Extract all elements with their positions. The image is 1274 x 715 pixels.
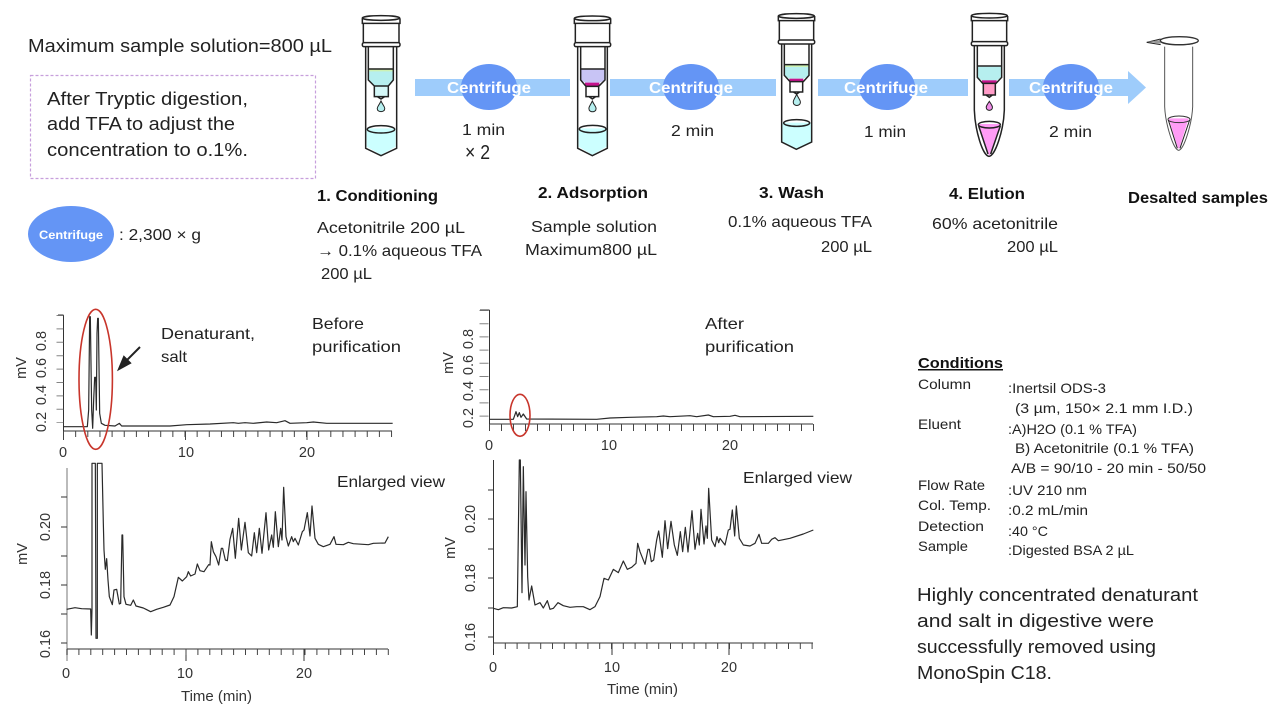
highlight: residual peak ellipse	[510, 394, 530, 436]
chart: after purification full scale: mV	[441, 352, 457, 374]
trace: after purification enlarged chromatogram	[493, 460, 813, 610]
callout: add TFA note	[30, 76, 316, 178]
panel: conditions: :0.2 mL/min	[1008, 502, 1088, 518]
label: after purification	[705, 316, 794, 356]
chart: before purification enlarged: 10	[177, 666, 193, 682]
callout: add TFA note: concentration to o.1%.	[47, 140, 248, 160]
chart: before purification full scale: 0.4	[34, 385, 50, 405]
step 2: adsorption	[525, 185, 657, 259]
label: enlarged view left: Enlarged view	[337, 474, 445, 491]
label: centrifuge time 1	[462, 122, 505, 164]
text block: conclusion: successfully removed using	[917, 637, 1156, 657]
chart: before purification full scale: 0.2	[34, 412, 50, 432]
chart: before purification full scale: 0	[59, 445, 67, 461]
chart: after purification enlarged: 0.18	[463, 564, 479, 592]
text block: conclusion	[917, 585, 1198, 683]
panel: conditions: Eluent	[918, 416, 961, 432]
arrow: step 3 to 4 centrifuge	[818, 64, 968, 110]
step 2: adsorption: 2. Adsorption	[538, 185, 648, 202]
step 4: elution: 60% acetonitrile	[932, 216, 1058, 233]
chart: before purification enlarged: 0.18	[38, 571, 54, 599]
label: before purification: Before	[312, 316, 364, 333]
step 4: elution: 200 µL	[1007, 239, 1058, 256]
chart: after purification enlarged: Time (min)	[607, 682, 678, 698]
chart: before purification enlarged	[15, 463, 389, 705]
chart: after purification enlarged: 0	[489, 660, 497, 676]
label: enlarged view right: Enlarged view	[743, 470, 852, 487]
step 1: conditioning	[317, 188, 482, 283]
panel: conditions: Conditions	[918, 355, 1003, 372]
arrow: step 4 to desalted samples	[1009, 64, 1146, 110]
chart: before purification full scale: 0.6	[34, 358, 50, 378]
chart: before purification full scale: mV	[14, 357, 30, 379]
chart: after purification full scale: 10	[601, 438, 617, 454]
label: centrifuge time 2: 2 min	[671, 123, 714, 140]
callout: add TFA note: add TFA to adjust the	[47, 114, 235, 134]
icon: elution spin tube	[971, 13, 1008, 156]
chart: after purification full scale: 0.4	[461, 381, 477, 401]
arrow: step 2 to 3 centrifuge	[610, 64, 776, 110]
step 4: elution	[932, 186, 1058, 256]
step 3: wash: 3. Wash	[759, 185, 824, 202]
label: denaturant, salt: Denaturant,	[161, 326, 255, 343]
chart: after purification enlarged: 0.16	[463, 623, 479, 651]
step 3: wash: 0.1% aqueous TFA	[728, 214, 872, 231]
step 5: desalted samples: Desalted samples	[1128, 190, 1268, 207]
icon: conditioning spin tube	[362, 16, 400, 156]
chart: before purification enlarged: 0.20	[38, 513, 54, 541]
chart: after purification full scale: 0.6	[461, 355, 477, 375]
chart: after purification full scale: 0.2	[461, 408, 477, 428]
chart: after purification full scale: 0	[485, 438, 493, 454]
chart: after purification full scale	[441, 310, 814, 454]
trace: before purification chromatogram	[63, 317, 393, 428]
panel: conditions: (3 µm, 150× 2.1 mm I.D.)	[1015, 400, 1193, 416]
text block: conclusion: Highly concentrated denaturant	[917, 585, 1198, 605]
icon: adsorption spin tube	[574, 16, 611, 156]
arrow: step 4 to desalted samples: Centrifuge	[1029, 80, 1113, 97]
panel: conditions	[918, 355, 1206, 558]
chart: before purification full scale: 10	[178, 445, 194, 461]
chart: before purification enlarged: Time (min)	[181, 689, 252, 705]
step 4: elution: 4. Elution	[949, 186, 1025, 203]
chart: after purification enlarged: 0.20	[463, 505, 479, 533]
label: denaturant, salt	[161, 326, 255, 366]
label: before purification	[312, 316, 401, 356]
callout: add TFA note: After Tryptic digestion,	[47, 89, 248, 109]
step 2: adsorption: Maximum800 µL	[525, 242, 657, 259]
heading: maximum sample solution: Maximum sample solution=800 µL	[28, 36, 332, 56]
panel: conditions: :Inertsil ODS-3	[1008, 380, 1106, 396]
text block: conclusion: MonoSpin C18.	[917, 663, 1052, 683]
chart: after purification full scale: 0.8	[461, 329, 477, 349]
step 1: conditioning: 200 µL	[321, 266, 372, 283]
panel: conditions: Sample	[918, 538, 968, 554]
chart: after purification full scale: 20	[722, 438, 738, 454]
icon: wash spin tube	[778, 14, 815, 149]
legend: centrifuge speed: Centrifuge	[39, 228, 103, 242]
label: after purification: After	[705, 316, 745, 333]
panel: conditions: :Digested BSA 2 µL	[1008, 542, 1134, 558]
trace: before purification enlarged chromatogram	[67, 463, 388, 638]
chart: before purification full scale: 20	[299, 445, 315, 461]
chart: after purification enlarged: 10	[604, 660, 620, 676]
label: centrifuge time 1: × 2	[465, 142, 490, 164]
icon: desalted sample microtube	[1147, 37, 1198, 150]
step 1: conditioning: → 0.1% aqueous TFA	[317, 243, 482, 260]
arrow: step 1 to 2 centrifuge: Centrifuge	[447, 80, 531, 97]
panel: conditions: Col. Temp.	[918, 497, 991, 513]
panel: conditions: Detection	[918, 518, 984, 534]
panel: conditions: Flow Rate	[918, 477, 985, 493]
chart: before purification enlarged: 20	[296, 666, 312, 682]
chart: after purification enlarged	[443, 460, 814, 698]
arrow: step 2 to 3 centrifuge: Centrifuge	[649, 80, 733, 97]
chart: before purification enlarged: mV	[15, 543, 31, 565]
step 1: conditioning: 1. Conditioning	[317, 188, 438, 205]
arrow: pointing at denaturant peak	[119, 347, 140, 369]
label: centrifuge time 4: 2 min	[1049, 124, 1092, 141]
panel: conditions: Column	[918, 376, 971, 392]
label: after purification: purification	[705, 339, 794, 356]
chart: before purification enlarged: 0.16	[38, 630, 54, 658]
step 3: wash	[728, 185, 872, 256]
text block: conclusion: and salt in digestive were	[917, 611, 1154, 631]
label: denaturant, salt: salt	[161, 349, 188, 366]
arrow: step 3 to 4 centrifuge: Centrifuge	[844, 80, 928, 97]
step 3: wash: 200 µL	[821, 239, 872, 256]
chart: after purification enlarged: mV	[443, 537, 459, 559]
chart: before purification full scale	[14, 315, 393, 461]
panel: conditions: B) Acetonitrile (0.1 % TFA)	[1015, 440, 1194, 456]
step 1: conditioning: Acetonitrile 200 µL	[317, 220, 465, 237]
legend: centrifuge speed	[28, 206, 201, 262]
label: centrifuge time 1: 1 min	[462, 122, 505, 139]
arrow: step 1 to 2 centrifuge	[415, 64, 570, 110]
chart: before purification enlarged: 0	[62, 666, 70, 682]
step 2: adsorption: Sample solution	[531, 219, 657, 236]
chart: before purification full scale: 0.8	[34, 331, 50, 351]
label: centrifuge time 3: 1 min	[864, 124, 906, 141]
panel: conditions: A/B = 90/10 - 20 min - 50/50	[1011, 460, 1206, 476]
panel: conditions: :UV 210 nm	[1008, 482, 1087, 498]
panel: conditions: :40 °C	[1008, 523, 1048, 539]
legend: centrifuge speed: : 2,300 × g	[119, 227, 201, 244]
highlight: denaturant peak ellipse	[79, 309, 112, 449]
label: before purification: purification	[312, 339, 401, 356]
panel: conditions: :A)H2O (0.1 % TFA)	[1008, 421, 1137, 437]
trace: after purification chromatogram	[489, 412, 813, 419]
chart: after purification enlarged: 20	[721, 660, 737, 676]
